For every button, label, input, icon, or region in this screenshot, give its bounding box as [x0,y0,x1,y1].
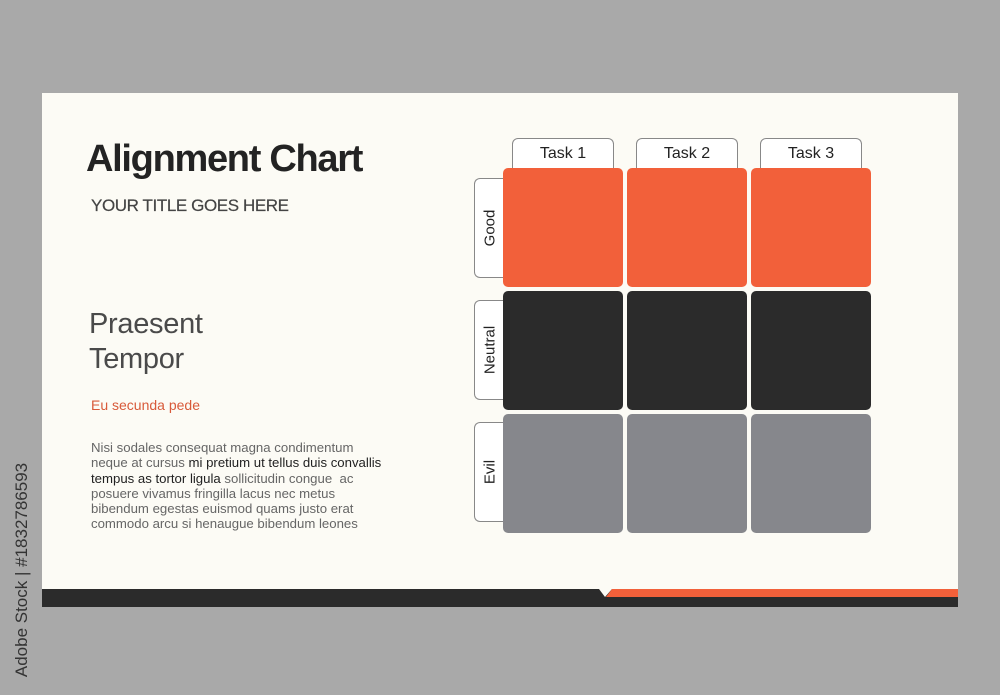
body text: commodo arcu si henaugue bibendum leones [91,516,358,531]
body text: tempus as tortor ligula sollicitudin congue ac [91,471,353,486]
row tabs [474,178,504,278]
chart: alignment grid: Task 3 [788,145,834,162]
side credit: Adobe Stock | #1832786593 [12,463,31,677]
chart: alignment grid [474,138,871,533]
footer bar [42,589,958,607]
body text: bibendum egestas euismod quams justo erat [91,501,353,516]
body text: posuere vivamus fringilla lacus nec metus [91,486,335,501]
heading: Praesent Tempor: Praesent [89,308,203,340]
heading: Praesent Tempor [89,308,203,375]
subtitle: YOUR TITLE GOES HERE [91,196,289,215]
chart: alignment grid: Neutral [481,326,498,374]
chart: alignment grid: Evil [481,460,498,484]
heading: Praesent Tempor: Tempor [89,343,184,375]
title: Alignment Chart [86,138,362,180]
chart: alignment grid: Task 2 [664,145,710,162]
row tabs: Good [481,210,498,246]
column tabs: Task 1 [540,145,586,162]
body text: neque at cursus mi pretium ut tellus duis convallis [91,455,381,470]
body text: Nisi sodales consequat magna condimentum [91,440,353,455]
card [42,93,958,607]
cells [503,168,623,287]
orange subheading: Eu secunda pede [91,397,200,413]
body text [91,440,381,531]
column tabs [512,138,614,169]
